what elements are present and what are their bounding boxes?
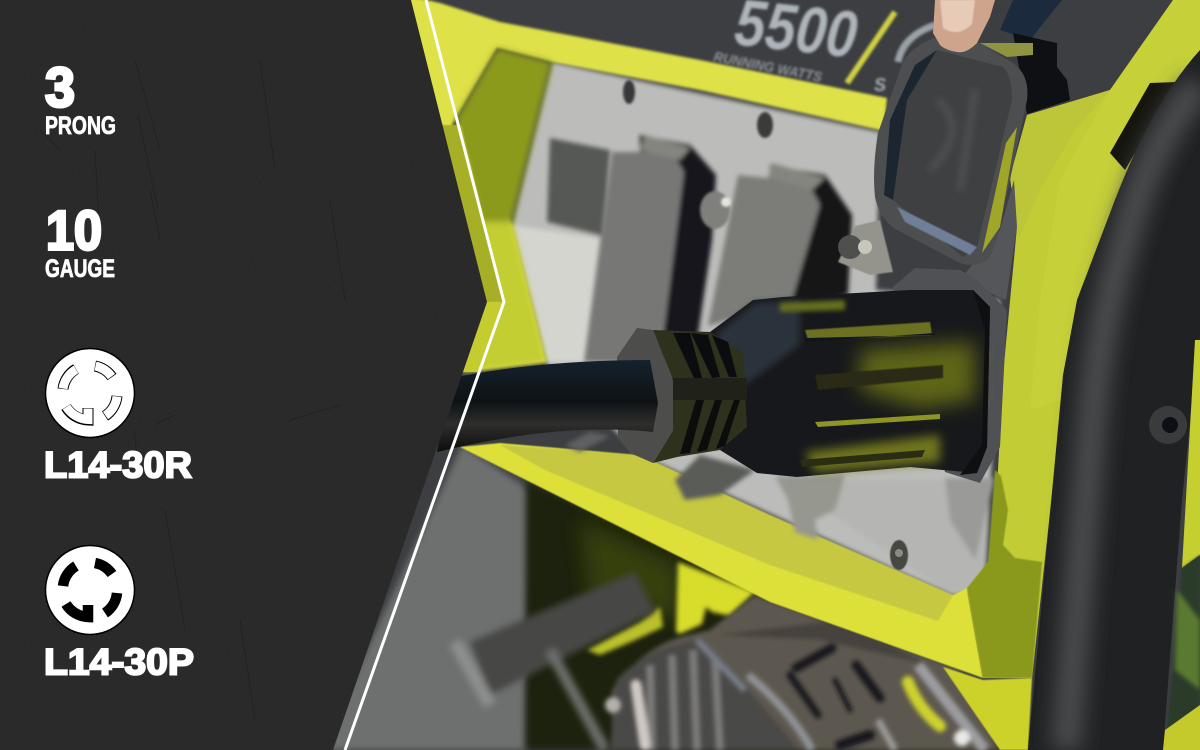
display window xyxy=(547,138,610,236)
icon: L14-30P plug xyxy=(46,546,134,634)
right yellow frame xyxy=(967,0,1200,678)
plug collar rim xyxy=(960,290,990,475)
flap hinge shadow xyxy=(1013,33,1070,114)
control panel lettering: 5500 running watts: S xyxy=(874,75,886,95)
shadow shapes on shelf xyxy=(565,432,845,540)
plug collar on panel xyxy=(893,268,1007,483)
engine cooling slots xyxy=(790,648,880,745)
outlet cover two xyxy=(708,163,852,326)
shaded olive recess xyxy=(455,48,552,372)
bolts and screws xyxy=(623,80,908,570)
plug grip ridges xyxy=(653,330,747,463)
spec: 10 gauge xyxy=(45,198,115,283)
spec: 3 prong: 3 xyxy=(45,56,75,118)
blurred handle xyxy=(455,572,655,750)
photo: generator with plugged-in cord xyxy=(320,0,1200,750)
grey control plate xyxy=(510,62,1000,596)
panel: dark textured sidebar xyxy=(0,0,490,750)
spec: 10 gauge: GAUGE xyxy=(45,255,115,283)
frame shaded olive area xyxy=(967,470,1042,678)
control panel lettering: 5500 running watts xyxy=(712,0,935,95)
icon: L14-30R receptacle xyxy=(46,348,134,438)
lower yellow shelf xyxy=(460,443,983,678)
control panel lettering: 5500 running watts: RUNNING WATTS xyxy=(712,48,824,85)
spec: 10 gauge: 10 xyxy=(46,198,102,262)
frame slot xyxy=(1110,82,1177,170)
dark blue shadow behind flap xyxy=(1000,0,1062,40)
lower background: grey wall xyxy=(320,445,530,750)
plug grooves xyxy=(805,322,932,340)
panel texture scratches xyxy=(40,60,345,720)
black tube frame xyxy=(1028,50,1200,750)
rubber flap cover xyxy=(874,38,1033,265)
tube screw xyxy=(1149,406,1187,444)
label: L14-30P: L14-30P xyxy=(44,642,194,682)
blurred engine housing xyxy=(610,595,1000,750)
chevron white line xyxy=(345,0,504,750)
lower background: dark recess xyxy=(526,480,1040,750)
grey shadow between flap and frame xyxy=(960,180,1017,300)
spec: 3 prong xyxy=(45,56,116,140)
plug body xyxy=(710,290,990,477)
plug end disc xyxy=(617,328,673,463)
strip in shade beside the chevron xyxy=(442,125,503,302)
yellow bracket behind engine xyxy=(587,562,755,655)
engine fan ribs and chrome xyxy=(605,640,985,750)
label: L14-30R: L14-30R xyxy=(44,444,192,486)
far right yellow and bottom xyxy=(1163,340,1200,750)
finger xyxy=(933,0,995,52)
power cord xyxy=(437,360,658,452)
outlet cover one xyxy=(584,135,716,362)
yellow lower frame leg xyxy=(943,667,1032,750)
spec: 3 prong: PRONG xyxy=(45,112,116,140)
upper yellow band and strip xyxy=(405,0,887,372)
